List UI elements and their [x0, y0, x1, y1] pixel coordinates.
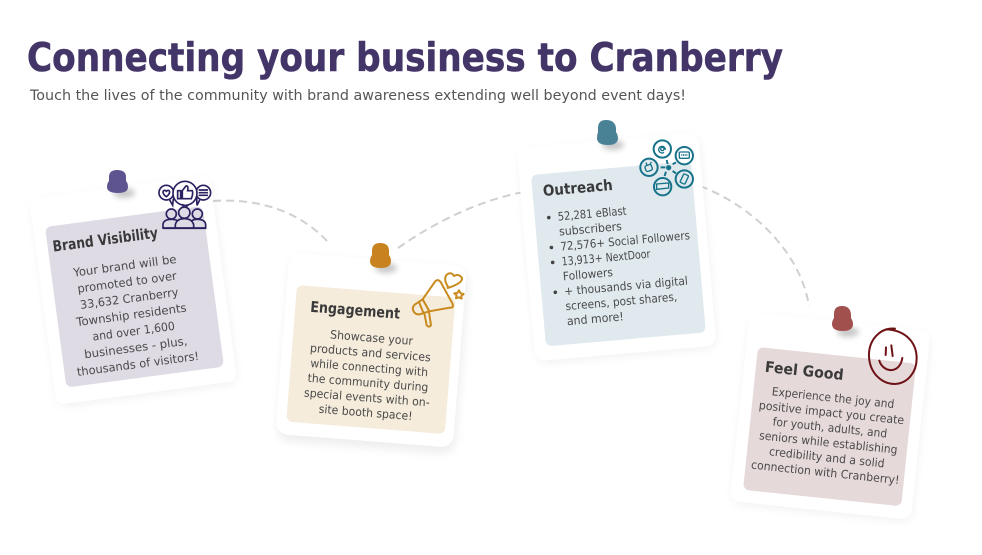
- connector: brand visibility to engagement: [213, 201, 328, 242]
- card content: and over 1,600: [91, 319, 176, 344]
- card content: subscribers: [558, 219, 622, 239]
- card content: the community during: [307, 371, 429, 394]
- connector: engagement to outreach: [398, 192, 524, 248]
- pin: teal: [597, 120, 624, 150]
- paper note shadow: [517, 132, 717, 363]
- pin: purple: [107, 170, 135, 198]
- card content: Feel Good: [764, 358, 844, 384]
- card content: seniors while establishing: [759, 428, 898, 457]
- icon: media channels: [640, 140, 693, 195]
- card content: site booth space!: [318, 402, 413, 423]
- card content: [743, 347, 916, 506]
- card content: and more!: [566, 309, 624, 328]
- card content: promoted to over: [77, 269, 178, 296]
- card content: for youth, adults, and: [772, 415, 888, 441]
- card content: Your brand will be: [71, 252, 177, 280]
- panel: feel good: [730, 306, 931, 522]
- card content: thousands of visitors!: [76, 349, 200, 379]
- card content: positive impact you create: [758, 398, 905, 427]
- card content: Showcase your: [330, 327, 414, 348]
- card content: Township residents: [74, 301, 187, 329]
- pin: orange: [370, 243, 397, 273]
- card content: 72,576+ Social Followers: [560, 228, 690, 253]
- card content: Brand Visibility: [51, 224, 159, 256]
- card content: credibility and a solid: [768, 444, 885, 470]
- icon: megaphone: [413, 273, 464, 327]
- card content: businesses - plus,: [83, 334, 188, 361]
- paper note shadow: [275, 252, 469, 454]
- pin: red: [832, 306, 859, 337]
- paper note shadow: [730, 312, 931, 522]
- card content: connection with Cranberry!: [750, 458, 900, 487]
- paper note shadow: [29, 175, 237, 407]
- panel: brand visibility: [29, 170, 237, 407]
- card content: Followers: [562, 265, 613, 283]
- icon: hand-drawn smiley: [869, 329, 917, 384]
- connector: outreach to feel good: [700, 186, 809, 306]
- card content: [286, 285, 456, 434]
- card content: products and services: [310, 341, 431, 364]
- card content: [531, 161, 706, 346]
- card content: 33,632 Cranberry: [79, 285, 179, 312]
- title: Connecting your business to Cranberry: [27, 36, 783, 81]
- card content: 52,281 eBlast: [557, 204, 627, 224]
- card content: special events with on-: [304, 386, 430, 409]
- subtitle: Touch the lives of the community with brand awareness extending well beyond event days!: [29, 88, 686, 104]
- panel: engagement: [275, 243, 469, 454]
- card content: + thousands via digital: [564, 274, 688, 298]
- card content: Outreach: [542, 176, 613, 200]
- card content: Experience the joy and: [771, 384, 895, 411]
- card content: 13,913+ NextDoor: [561, 247, 651, 268]
- panel: outreach: [517, 120, 717, 363]
- card content: while connecting with: [310, 356, 429, 379]
- icon: social engagement crowd: [159, 181, 211, 228]
- card content: [45, 206, 224, 388]
- card content: screens, post shares,: [565, 290, 678, 313]
- card content: Engagement: [310, 298, 401, 323]
